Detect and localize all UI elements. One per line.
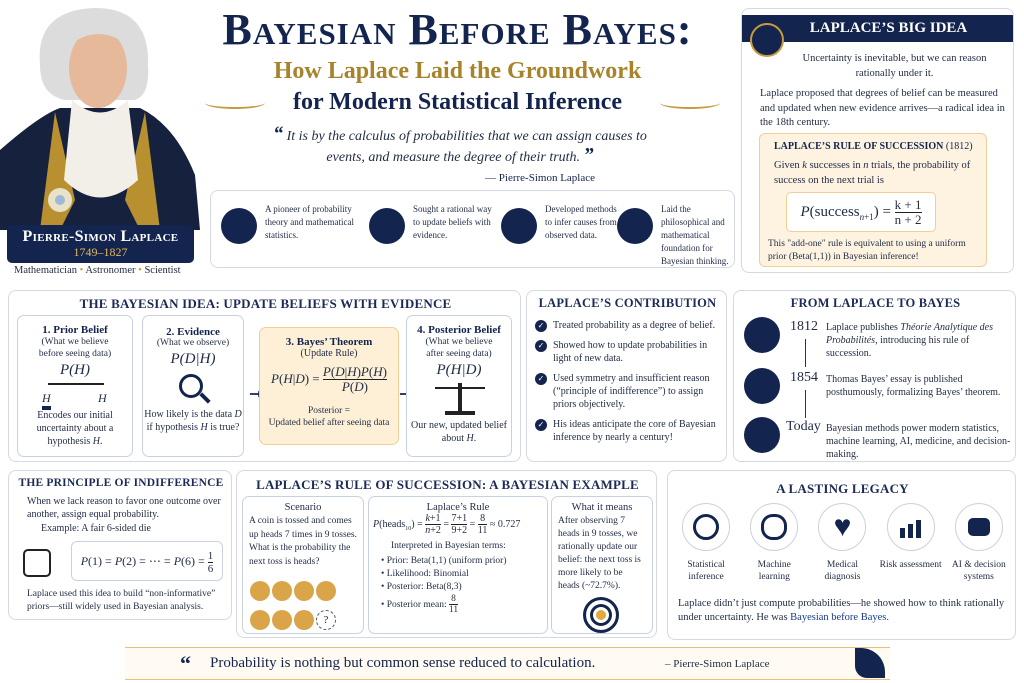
panel: contribution: LAPLACE’S CONTRIBUTION [539, 296, 716, 310]
title: Bayesian Before Bayes: [222, 5, 692, 54]
panel: big idea [741, 8, 1014, 273]
icon: AI: AI & decision systems [952, 560, 1006, 582]
panel: principle of indifference: Example: A fair 6-sided die [41, 523, 151, 534]
panel: big idea: This "add-one" rule is equivalent to using a uniform prior (Beta(1,1)) in Bayesian inference! [768, 239, 966, 262]
panel: contribution: Treated probability as a degree of belief. [553, 320, 715, 331]
ornaments [205, 97, 265, 109]
laplace's rule: 9+2 [451, 525, 467, 536]
panel: big idea: LAPLACE’S BIG IDEA [810, 20, 967, 36]
panel: big idea: P(successn+1) = [800, 204, 891, 222]
laplace's rule: • Likelihood: Binomial [381, 569, 469, 579]
step 2: P(D|H) [171, 351, 215, 367]
panel: bayesian idea [8, 290, 521, 462]
step 1: (What we believe [42, 337, 108, 347]
laplace's rule: 8 [480, 513, 485, 524]
step 2: 2. Evidence [166, 326, 220, 338]
panel: big idea: n + 2 [895, 212, 922, 227]
step 3: Updated belief after seeing data [269, 418, 389, 428]
arrow: ➞ [249, 386, 262, 403]
panel: contribution: Showed how to update probabilities in light of new data. [553, 340, 707, 364]
panel: principle of indifference: 6 [208, 563, 213, 575]
laplace's rule [368, 496, 548, 634]
icon: risk: Risk assessment [880, 560, 942, 570]
scenario [242, 496, 364, 634]
panel: laplace to bayes: FROM LAPLACE TO BAYES [791, 296, 960, 310]
laplace's rule: Laplace’s Rule [427, 502, 489, 513]
step 1: before seeing data) [39, 349, 111, 359]
laplace's rule: • Posterior: Beta(8,3) [381, 582, 462, 592]
panel: big idea: Uncertainty is inevitable, but we can reason rationally under it. [802, 53, 986, 79]
step 2 [142, 315, 244, 457]
panel: big idea: Given k successes in n trials, the probability of success on the next trial is [774, 160, 970, 186]
feature: rational [369, 204, 492, 244]
panel: contribution: ✓ [538, 321, 544, 330]
step 4: Our new, updated belief about H. [411, 420, 507, 444]
feature: pioneer [221, 204, 354, 244]
panel: principle of indifference: THE PRINCIPLE OF INDIFFERENCE [18, 477, 224, 489]
title: for Modern Statistical Inference [293, 89, 622, 115]
feature: foundation [617, 204, 728, 266]
panel: contribution: ✓ [538, 420, 544, 429]
scenario: Scenario [285, 502, 321, 513]
panel: contribution [526, 290, 727, 462]
step 1: Encodes our initial uncertainty about a hypothesis H. [37, 410, 113, 447]
laplace's rule: 7+1 [451, 513, 467, 524]
what it means: What it means [572, 502, 632, 513]
panel: principle of indifference: When we lack reason to favor one outcome over another, assign equal probability. [27, 496, 221, 520]
panel: principle of indifference [8, 470, 232, 620]
features box [210, 190, 735, 268]
quote: “ It is by the calculus of probabilities that we can assign causes to events, and measure the degree of their truth. ” [273, 123, 647, 166]
panel: contribution: Used symmetry and insufficient reason (“principle of indifference”) to assign priors objectively. [553, 373, 709, 410]
step 1: H [42, 391, 51, 405]
panel: laplace to bayes: 1854 [790, 370, 818, 385]
step 3: Posterior = [308, 406, 350, 416]
panel: laplace to bayes: Laplace publishes Théorie Analytique des Probabilités, introducing his rule of succession. [826, 322, 993, 359]
icon: AI [952, 503, 1006, 582]
step 3: P(D) [342, 379, 368, 394]
laplace's rule: 11 [449, 605, 458, 615]
icon: medical [818, 503, 866, 582]
icon: medical: Medical diagnosis [825, 560, 860, 582]
laplace's rule: n+2 [425, 525, 441, 536]
panel: legacy [667, 470, 1016, 640]
what it means [551, 496, 653, 634]
step 4: after seeing data) [426, 349, 492, 359]
step 3: (Update Rule) [301, 348, 357, 359]
scenario: ? [324, 614, 328, 626]
panel: principle of indifference: Laplace used this idea to build “non-informative” priors—still widely used in Bayesian analysis. [27, 589, 215, 612]
bottom quote [125, 647, 890, 680]
panel: rule of succession example: LAPLACE’S RULE OF SUCCESSION: A BAYESIAN EXAMPLE [256, 477, 639, 492]
panel: bayesian idea: THE BAYESIAN IDEA: UPDATE BELIEFS WITH EVIDENCE [80, 296, 451, 311]
step 3: P(D|H)P(H) [323, 364, 387, 379]
feature: methods: Developed methods to infer causes from observed data. [545, 204, 617, 240]
step 1 [17, 315, 133, 457]
laplace's rule: 8 [451, 594, 456, 604]
what it means: After observing 7 heads in 9 tosses, we rationally update our belief: the next toss is more likely to be heads (~72.7%). [558, 516, 641, 591]
step 1: 1. Prior Belief [42, 324, 108, 336]
panel: principle of indifference: P(1) = P(2) = ⋯ = P(6) = [81, 554, 205, 568]
panel: laplace to bayes: Today [786, 419, 821, 434]
step 4 [406, 315, 512, 457]
step 4: (What we believe [426, 337, 492, 347]
step 3 [259, 327, 399, 445]
bottom quote: – Pierre-Simon Laplace [665, 658, 769, 670]
laplace's rule: 11 [478, 525, 487, 536]
laplace's rule: • Posterior mean: [381, 600, 447, 610]
panel: laplace to bayes: 1812 [790, 319, 818, 334]
step 3: 3. Bayes’ Theorem [286, 336, 372, 348]
panel: laplace to bayes: Bayesian methods power modern statistics, machine learning, AI, medicine, and decision-making. [826, 423, 1010, 460]
feature: pioneer: A pioneer of probability theory and mathematical statistics. [265, 204, 354, 240]
name plate: Pierre-Simon Laplace [23, 228, 178, 245]
step 4: 4. Posterior Belief [417, 324, 501, 336]
name plate: 1749–1827 [74, 245, 128, 259]
step 1: P(H) [60, 362, 90, 378]
arrow: ➞ [399, 386, 412, 403]
panel: legacy: A LASTING LEGACY [776, 481, 909, 496]
roles: Mathematician • Astronomer • Scientist [14, 265, 181, 276]
step 4: P(H|D) [437, 362, 481, 378]
step 3: P(H|D) = [271, 371, 320, 386]
panel: contribution: ✓ [538, 374, 544, 383]
icon: statistical inference [682, 503, 730, 582]
step 1: H [98, 391, 107, 405]
laplace's rule: • Prior: Beta(1,1) (uniform prior) [381, 556, 506, 566]
name plate [7, 225, 194, 263]
feature: methods [501, 204, 617, 244]
icon: machine learning: Machine learning [758, 560, 791, 582]
panel: contribution: His ideas anticipate the core of Bayesian inference by nearly a century! [553, 419, 716, 443]
icon: quill [855, 648, 885, 678]
panel: big idea: k + 1 [895, 197, 922, 212]
panel: principle of indifference: 1 [208, 550, 213, 562]
bottom quote: “ [180, 651, 191, 676]
feature: rational: Sought a rational way to update beliefs with evidence. [413, 204, 492, 240]
portrait [0, 8, 200, 230]
panel: laplace to bayes: Thomas Bayes’ essay is published posthumously, formalizing Bayes’ theorem. [826, 374, 1000, 398]
title: How Laplace Laid the Groundwork [274, 58, 641, 84]
scenario: A coin is tossed and comes up heads 7 times in 9 tosses. What is the probability the next toss is heads? [249, 516, 357, 566]
icon: machine learning [750, 503, 798, 582]
panel: laplace to bayes [733, 290, 1016, 462]
bottom quote: Probability is nothing but common sense reduced to calculation. [210, 655, 595, 671]
laplace's rule: Interpreted in Bayesian terms: [391, 541, 506, 551]
icon: risk [880, 503, 942, 570]
panel: big idea: Laplace proposed that degrees of belief can be measured and updated when new evidence arrives—a radical idea in the 18th century. [760, 88, 1005, 128]
panel: rule of succession example [236, 470, 657, 638]
feature: foundation: Laid the philosophical and mathematical foundation for Bayesian thinking. [661, 204, 728, 266]
icon: statistical inference: Statistical inference [687, 560, 725, 582]
laplace's rule: P(heads10) = = = ≈ 0.727 [373, 519, 520, 532]
title [222, 5, 692, 115]
panel: legacy: Laplace didn’t just compute probabilities—he showed how to think rationally under uncertainty. He was Bayesian before Bayes. [678, 598, 1004, 623]
quote: — Pierre-Simon Laplace [485, 172, 595, 184]
step 2: (What we observe) [157, 338, 229, 348]
panel: big idea: LAPLACE’S RULE OF SUCCESSION (1812) [774, 141, 973, 152]
step 2: How likely is the data D if hypothesis H is true? [144, 409, 242, 433]
icon: medical: ♥ [834, 510, 851, 543]
panel: contribution: ✓ [538, 341, 544, 350]
laplace's rule: k+1 [425, 513, 441, 524]
